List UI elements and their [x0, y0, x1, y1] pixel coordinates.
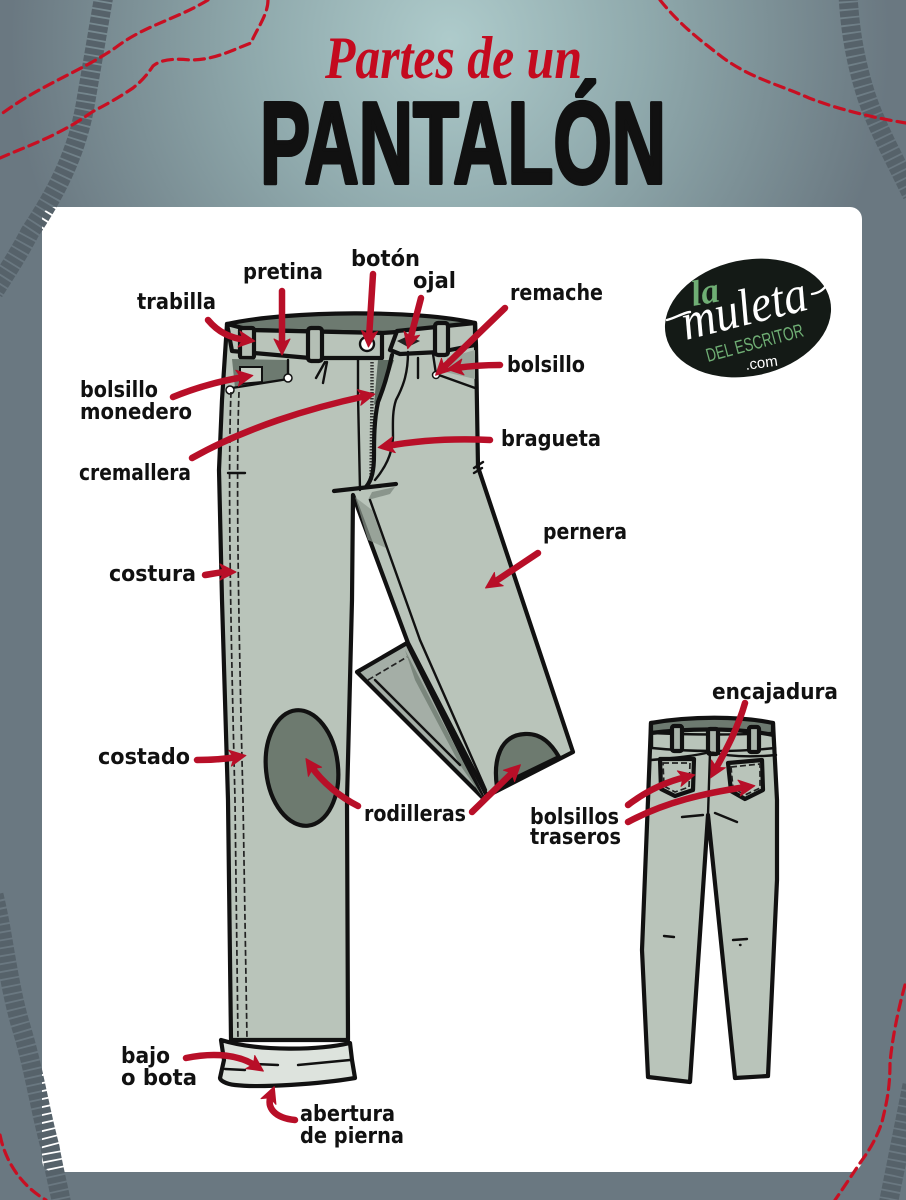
back pockets: [660, 759, 763, 799]
labels: [79, 247, 838, 1149]
logo word: muleta: muleta: [675, 265, 813, 352]
arrow: cremallera: [192, 396, 366, 458]
label: bolsillos traseros: traseros: [530, 825, 621, 850]
arrow: bragueta: [387, 439, 490, 446]
back belt loops: [672, 726, 759, 754]
button: [360, 337, 374, 351]
inseam line on right leg: [370, 500, 486, 790]
logo: la muleta del escritor: [654, 244, 842, 392]
label: bolsillo: bolsillo: [507, 353, 585, 378]
logo .com: .com: [744, 353, 779, 374]
label: bajo o bota: o bota: [121, 1066, 197, 1091]
label: costura: costura: [109, 562, 196, 587]
arrow: rodillera derecha: [472, 771, 514, 812]
label: bolsillos traseros: bolsillos: [530, 805, 619, 830]
trouser turned-up leg back: [357, 643, 483, 798]
label: pretina: pretina: [243, 260, 323, 285]
label: bolsillo monedero: monedero: [80, 400, 192, 425]
panel: white card: [42, 207, 862, 1172]
arrow: encajadura: [715, 703, 745, 770]
label: rodilleras: rodilleras: [364, 802, 466, 827]
buttonhole: [397, 336, 420, 347]
label: remache: remache: [510, 281, 603, 306]
arrow: abertura de pierna: [270, 1095, 295, 1120]
label: pernera: pernera: [543, 520, 627, 545]
label: botón: botón: [351, 247, 420, 272]
bar tacks: [316, 362, 483, 473]
illustration: main trousers: [219, 313, 573, 1086]
label: ojal: ojal: [413, 269, 456, 294]
label: costado: costado: [98, 745, 190, 770]
label: abertura de pierna: abertura: [300, 1102, 395, 1127]
label: encajadura: encajadura: [712, 680, 838, 705]
title: [260, 25, 666, 208]
back waistband: [652, 733, 775, 751]
arrow: costura: [205, 572, 227, 575]
trouser body outline: [219, 323, 573, 1040]
fly and zipper: [334, 352, 418, 548]
right pocket: [432, 350, 475, 388]
arrow: botón: [369, 274, 373, 338]
label: bragueta: bragueta: [501, 427, 601, 452]
waistband right: [390, 323, 475, 354]
belt loops: [240, 323, 448, 361]
logo flourish: [667, 286, 826, 320]
arrow: remache: [442, 308, 505, 369]
label: trabilla: trabilla: [137, 290, 216, 315]
coin pocket: [226, 359, 292, 394]
arrow: rodillera izquierda: [311, 766, 358, 806]
knee ticks: [664, 936, 747, 945]
waist inner: [227, 313, 475, 345]
arrow: bolsillo trasero izquierdo: [628, 777, 686, 805]
arrow: pretina: [279, 291, 285, 346]
waistband left: [227, 324, 382, 358]
title line: PANTALÓN: PANTALÓN: [260, 78, 666, 208]
logo word: la: la: [687, 270, 722, 314]
label: abertura de pierna: de pierna: [300, 1124, 404, 1149]
arrow: bolsillo trasero derecho: [628, 787, 746, 822]
logo subtitle: DEL ESCRITOR: [704, 321, 806, 367]
left knee patch: [260, 707, 344, 829]
label: cremallera: cremallera: [79, 461, 191, 486]
cuff: [220, 1040, 355, 1086]
seam stitching: [228, 392, 247, 1040]
arrow: bajo o bota: [186, 1055, 256, 1066]
arrow: costado: [197, 757, 237, 760]
back trousers outline: [642, 723, 777, 1082]
arrows: [173, 274, 746, 1120]
arrow: pernera: [493, 553, 538, 583]
arrow: bolsillo monedero: [173, 377, 244, 397]
arrow: ojal: [410, 298, 421, 340]
illustration: back view trousers: [642, 718, 777, 1082]
arrow: trabilla: [208, 320, 246, 340]
back waist inner: [651, 718, 773, 735]
label: bolsillo monedero: bolsillo: [80, 378, 158, 403]
right knee patch: [496, 734, 559, 787]
yoke and seam: [651, 752, 776, 822]
arrow: bolsillo: [456, 365, 500, 368]
title line: Partes de un: Partes de un: [324, 25, 582, 91]
label: bajo o bota: bajo: [121, 1044, 170, 1069]
